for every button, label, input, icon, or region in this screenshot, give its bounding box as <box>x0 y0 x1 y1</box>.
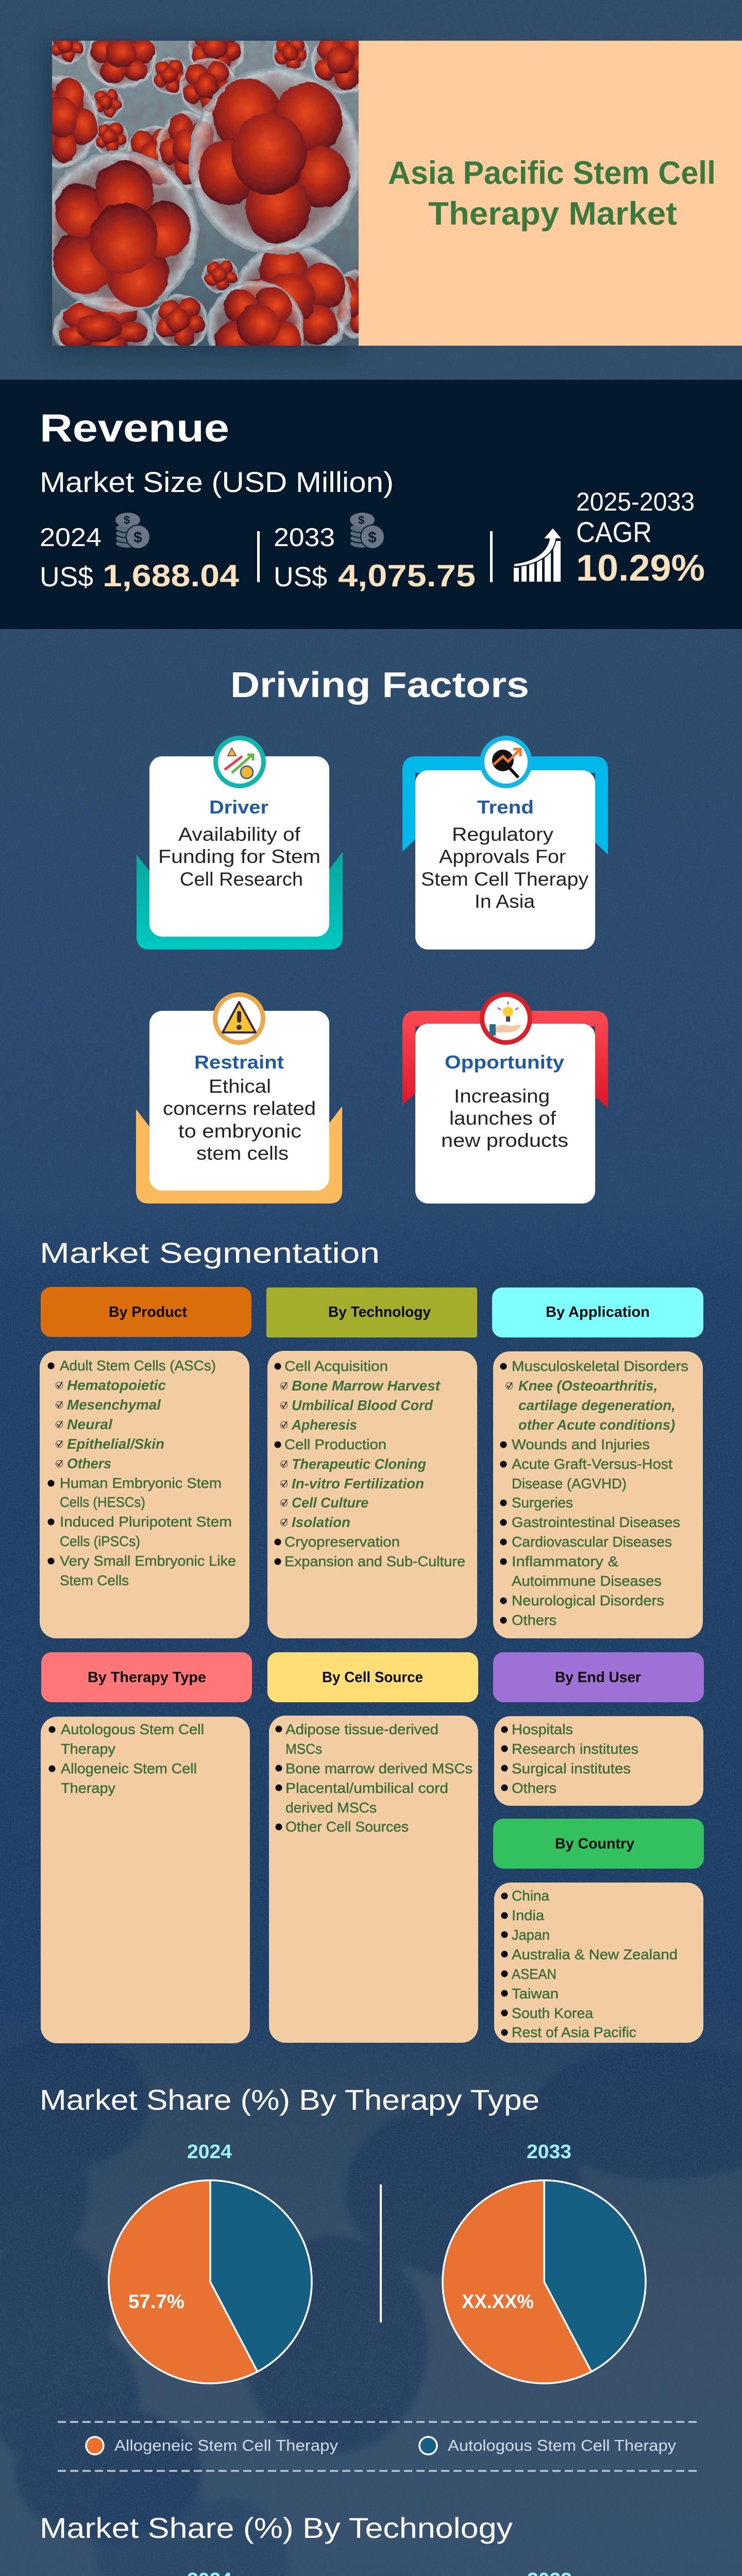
panel: by country: South Korea <box>512 2005 593 2021</box>
panel: by application: Neurological Disorders <box>512 1592 664 1608</box>
card text <box>421 824 589 912</box>
legend: therapy type <box>86 2436 677 2454</box>
card text: Cell Research <box>180 869 303 890</box>
panel: by application: Surgeries <box>512 1495 573 1511</box>
panel: by product: Cells (HESCs) <box>60 1494 145 1510</box>
card text: new products <box>441 1130 568 1151</box>
panel: by product: Adult Stem Cells (ASCs) <box>60 1358 216 1374</box>
panel: by technology: Isolation <box>292 1514 350 1530</box>
panel: by technology: Apheresis <box>291 1417 357 1433</box>
header: by end user <box>493 1652 704 1702</box>
stat: CAGR: 2025-2033 <box>576 487 695 516</box>
panel: by application: Disease (AGVHD) <box>512 1476 627 1492</box>
stat: CAGR: CAGR <box>576 516 652 548</box>
header: by product: By Product <box>109 1304 187 1320</box>
panel: by country: Japan <box>512 1927 550 1943</box>
panel: by application: Gastrointestinal Diseases <box>512 1514 680 1530</box>
card text: to embryonic <box>178 1121 301 1142</box>
panel: by technology: Cell Production <box>284 1436 386 1452</box>
stat: 2024 revenue: 2024 <box>40 523 102 552</box>
panel: by technology: Cryopreservation <box>284 1534 400 1550</box>
card: opportunity <box>402 992 608 1204</box>
panel: by country: India <box>512 1907 544 1923</box>
header: by product <box>41 1287 251 1337</box>
year label 2024: 2024 <box>187 2141 232 2163</box>
panel: by end user: Hospitals <box>512 1721 573 1737</box>
card text: launches of <box>449 1108 556 1129</box>
card text: Ethical <box>209 1076 271 1097</box>
header: by therapy type <box>41 1652 252 1702</box>
title: Therapy Market <box>428 196 677 232</box>
heading: driving factors: Driving Factors <box>230 665 529 705</box>
header: by cell source <box>267 1652 478 1702</box>
card text: stem cells <box>196 1143 289 1164</box>
card: restraint <box>136 992 342 1204</box>
card title: Driver <box>209 796 268 818</box>
panel: by application: cartilage degeneration, <box>518 1397 676 1413</box>
panel: by application <box>493 1351 703 1638</box>
header: by end user: By End User <box>555 1669 641 1686</box>
panel: by country: Rest of Asia Pacific <box>512 2024 636 2040</box>
panel: by product: Mesenchymal <box>67 1397 161 1413</box>
panel: by cell source: MSCs <box>285 1741 322 1757</box>
stat: 2033 revenue <box>274 513 476 593</box>
panel: by product: Hematopoietic <box>67 1377 166 1393</box>
panel: by end user: Others <box>512 1780 556 1796</box>
panel: by application: Cardiovascular Diseases <box>512 1534 672 1550</box>
card text: Approvals For <box>439 846 566 867</box>
card text: Stem Cell Therapy <box>421 869 589 890</box>
panel: by country: China <box>512 1888 549 1904</box>
panel: by product: Neural <box>67 1416 113 1432</box>
card text: Increasing <box>454 1086 550 1107</box>
title <box>388 155 716 232</box>
panel: by cell source: Adipose tissue-derived <box>285 1721 439 1737</box>
panel: by technology: Expansion and Sub-Culture <box>284 1553 465 1569</box>
heading: market share by therapy type: Market Share (%) By Therapy Type <box>40 2083 539 2116</box>
icon: driver <box>213 736 266 788</box>
panel: by product: Induced Pluripotent Stem <box>60 1514 232 1530</box>
panel: by technology: Therapeutic Cloning <box>292 1456 426 1472</box>
pie chart: therapy type 2024 <box>109 2180 312 2383</box>
header: by therapy type: By Therapy Type <box>88 1669 206 1686</box>
panel: by application: Knee (Osteoarthritis, <box>518 1378 657 1394</box>
panel: by application: Inflammatory & <box>512 1553 618 1569</box>
panel: by end user: Research institutes <box>512 1741 638 1757</box>
title: Asia Pacific Stem Cell <box>388 155 716 191</box>
panel: by application: Wounds and Injuries <box>512 1436 650 1452</box>
pie chart: therapy type 2033 <box>443 2180 646 2383</box>
panel: by product: Stem Cells <box>60 1572 129 1588</box>
panel: by end user: Surgical institutes <box>512 1760 631 1776</box>
panel: by country <box>494 1883 703 2043</box>
panel: by cell source: Bone marrow derived MSCs <box>285 1760 473 1776</box>
panel: by product <box>40 1351 249 1638</box>
stat: 2024 revenue: 1,688.04 <box>103 558 240 593</box>
panel: by application: Acute Graft-Versus-Host <box>512 1456 672 1472</box>
panel: by product: Others <box>67 1455 111 1471</box>
panel: by therapy type: Therapy <box>61 1780 115 1796</box>
card text: Availability of <box>178 824 301 845</box>
icon: growth arrow <box>514 528 562 582</box>
panel: by product: Human Embryonic Stem <box>60 1475 222 1491</box>
card text: Regulatory <box>452 824 554 845</box>
panel: by cell source: Other Cell Sources <box>285 1819 409 1835</box>
panel: by technology: Umbilical Blood Cord <box>292 1397 433 1413</box>
panel: by country: Australia & New Zealand <box>512 1946 678 1962</box>
card: trend <box>402 736 608 950</box>
panel: by therapy type: Therapy <box>61 1741 115 1757</box>
panel: by application: other Acute conditions) <box>518 1417 675 1433</box>
legend: therapy type: Allogeneic Stem Cell Therapy <box>114 2436 339 2454</box>
panel: by technology: In-vitro Fertilization <box>292 1476 424 1492</box>
panel: by technology <box>267 1351 477 1638</box>
card: driver <box>137 736 343 950</box>
stat: 2033 revenue: 4,075.75 <box>338 558 476 593</box>
header: by country <box>493 1819 704 1869</box>
stat: CAGR: 10.29% <box>576 548 705 589</box>
hero image: stem cells <box>40 36 361 359</box>
header: by application <box>492 1287 703 1337</box>
header: by country: By Country <box>555 1836 634 1852</box>
market size label: Market Size (USD Million) <box>40 466 394 498</box>
stat: CAGR <box>576 487 705 589</box>
card text: concerns related <box>163 1098 316 1119</box>
panel: by end user <box>494 1716 703 1806</box>
card text: In Asia <box>475 891 535 912</box>
panel: by cell source: Placental/umbilical cord <box>285 1780 448 1796</box>
heading: market segmentation: Market Segmentation <box>40 1236 380 1269</box>
card text <box>158 824 321 890</box>
panel: by application: Autoimmune Diseases <box>512 1573 662 1589</box>
title panel <box>359 41 742 346</box>
panel: by technology: Cell Acquisition <box>284 1358 388 1374</box>
panel: by application: Musculoskeletal Disorders <box>512 1358 688 1374</box>
stat: 2024 revenue <box>40 513 240 593</box>
card text <box>163 1076 316 1164</box>
year label 2033: 2033 <box>527 2141 571 2163</box>
panel: by therapy type <box>41 1717 250 2043</box>
card title: Restraint <box>194 1052 284 1073</box>
panel: by therapy type: Allogeneic Stem Cell <box>61 1760 197 1776</box>
legend: therapy type: Autologous Stem Cell Therapy <box>448 2436 677 2454</box>
panel: by cell source: derived MSCs <box>285 1800 377 1816</box>
panel: by product: Epithelial/Skin <box>67 1436 164 1452</box>
heading: revenue: Revenue <box>40 406 229 450</box>
header: by technology <box>266 1287 477 1337</box>
card text: Funding for Stem <box>158 846 321 867</box>
card title: Opportunity <box>445 1052 564 1073</box>
header: by cell source: By Cell Source <box>322 1669 423 1686</box>
icon: trend <box>480 736 532 788</box>
panel: by cell source <box>269 1716 478 2043</box>
card text <box>441 1086 568 1151</box>
stat: 2024 revenue: US$ <box>40 562 93 592</box>
panel: by product: Very Small Embryonic Like <box>60 1553 236 1569</box>
card title: Trend <box>477 796 534 818</box>
icon: restraint <box>213 992 265 1045</box>
panel: by country: Taiwan <box>512 1986 559 2002</box>
panel: by therapy type: Autologous Stem Cell <box>61 1721 204 1737</box>
panel: by technology: Bone Marrow Harvest <box>292 1378 441 1394</box>
icon: opportunity <box>480 992 532 1045</box>
panel: by country: ASEAN <box>512 1966 556 1982</box>
header: by application: By Application <box>546 1304 650 1320</box>
stat: 2033 revenue: US$ <box>274 562 327 592</box>
panel: by product: Cells (iPSCs) <box>60 1533 140 1549</box>
panel: by application: Others <box>512 1612 556 1628</box>
pie chart: therapy type 2024: 57.7% <box>128 2291 184 2313</box>
heading: market share by technology: Market Share (%) By Technology <box>40 2512 513 2544</box>
stat: 2033 revenue: 2033 <box>274 523 335 552</box>
revenue band <box>0 380 742 629</box>
pie chart: therapy type 2033: XX.XX% <box>462 2291 534 2313</box>
header: by technology: By Technology <box>328 1304 431 1320</box>
panel: by technology: Cell Culture <box>292 1495 368 1511</box>
